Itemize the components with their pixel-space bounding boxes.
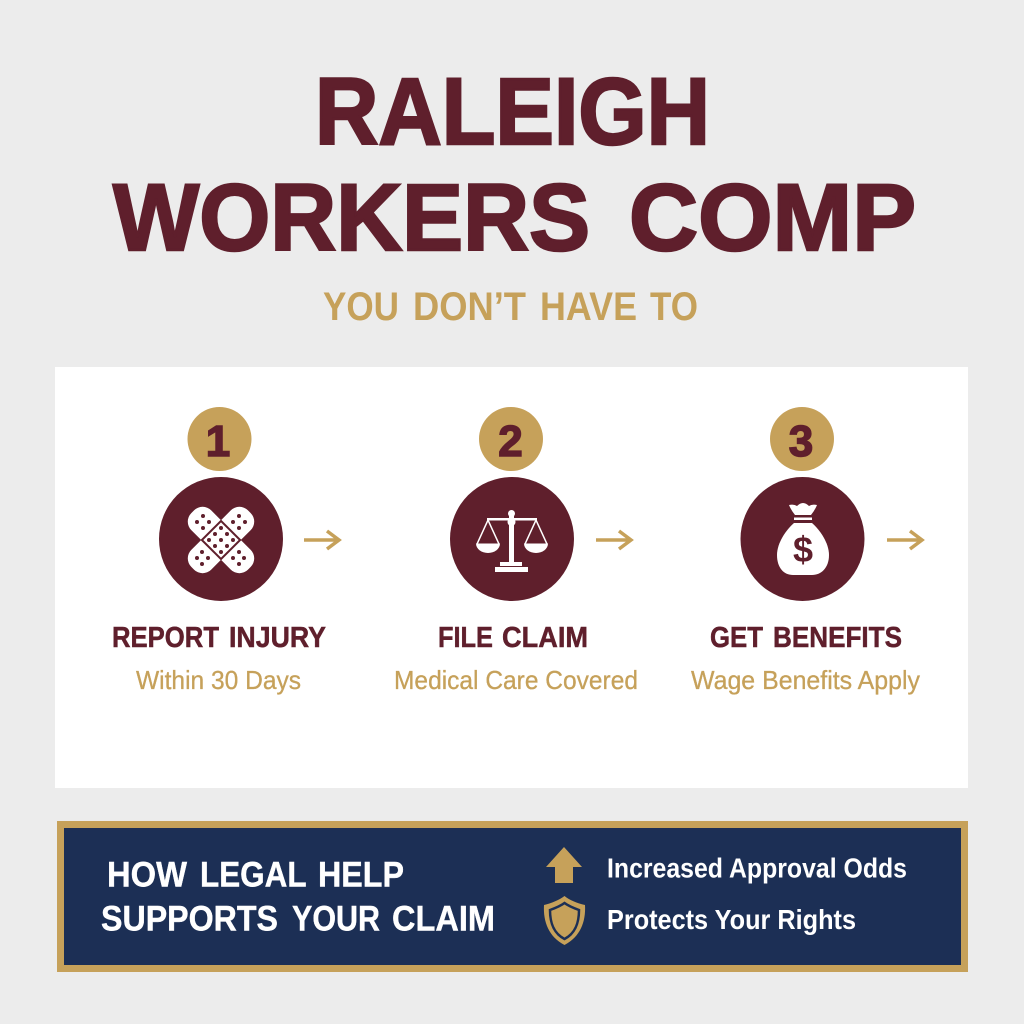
arrow 1 xyxy=(304,531,339,549)
step 3 detail: Wage Benefits Apply xyxy=(691,665,920,695)
badge: number 1 xyxy=(188,407,252,471)
title: WORKERS xyxy=(113,165,590,271)
subtitle: DON’T xyxy=(413,285,526,329)
step 3 xyxy=(691,407,922,695)
banner heading: LEGAL xyxy=(200,856,306,894)
step 2 detail: Medical Care Covered xyxy=(394,665,638,695)
badge: number 2 xyxy=(479,407,543,471)
step 1 label: INJURY xyxy=(229,622,326,654)
step 1 xyxy=(112,407,339,695)
icon: shield xyxy=(544,896,585,945)
panel: steps xyxy=(55,367,968,788)
subtitle: YOU xyxy=(323,285,399,329)
title: RALEIGH xyxy=(315,59,710,165)
banner heading: CLAIM xyxy=(392,900,495,938)
banner heading: HELP xyxy=(318,856,404,894)
step 3 label: GET xyxy=(710,622,763,654)
banner heading: SUPPORTS xyxy=(101,900,278,938)
badge: number 2: 2 xyxy=(498,417,523,466)
step 2 label: CLAIM xyxy=(502,622,588,654)
title: COMP xyxy=(629,165,916,271)
badge: number 1: 1 xyxy=(206,417,230,466)
subtitle: TO xyxy=(650,285,698,329)
banner heading xyxy=(101,856,495,938)
banner heading: YOUR xyxy=(292,900,380,938)
icon: scales of justice xyxy=(450,477,574,601)
panel: legal help banner xyxy=(60,824,964,968)
badge: number 3 xyxy=(770,407,834,471)
icon: bandage xyxy=(159,477,283,601)
icon: money bag: $ xyxy=(793,529,813,570)
benefit: protects rights: Protects Your Rights xyxy=(607,904,856,935)
icon: money bag xyxy=(740,477,864,601)
step 3 label: BENEFITS xyxy=(773,622,902,654)
icon: up arrow xyxy=(546,847,582,883)
arrow 3 xyxy=(887,531,922,549)
step 2 label: FILE xyxy=(438,622,493,654)
step 1 detail: Within 30 Days xyxy=(136,665,301,695)
step 2 xyxy=(394,407,638,695)
title xyxy=(113,59,916,271)
badge: number 3: 3 xyxy=(789,417,813,466)
arrow 2 xyxy=(596,531,631,549)
banner heading: HOW xyxy=(107,856,187,894)
subtitle: HAVE xyxy=(540,285,637,329)
benefit: approval odds: Increased Approval Odds xyxy=(607,852,907,884)
step 1 label: REPORT xyxy=(112,622,219,654)
